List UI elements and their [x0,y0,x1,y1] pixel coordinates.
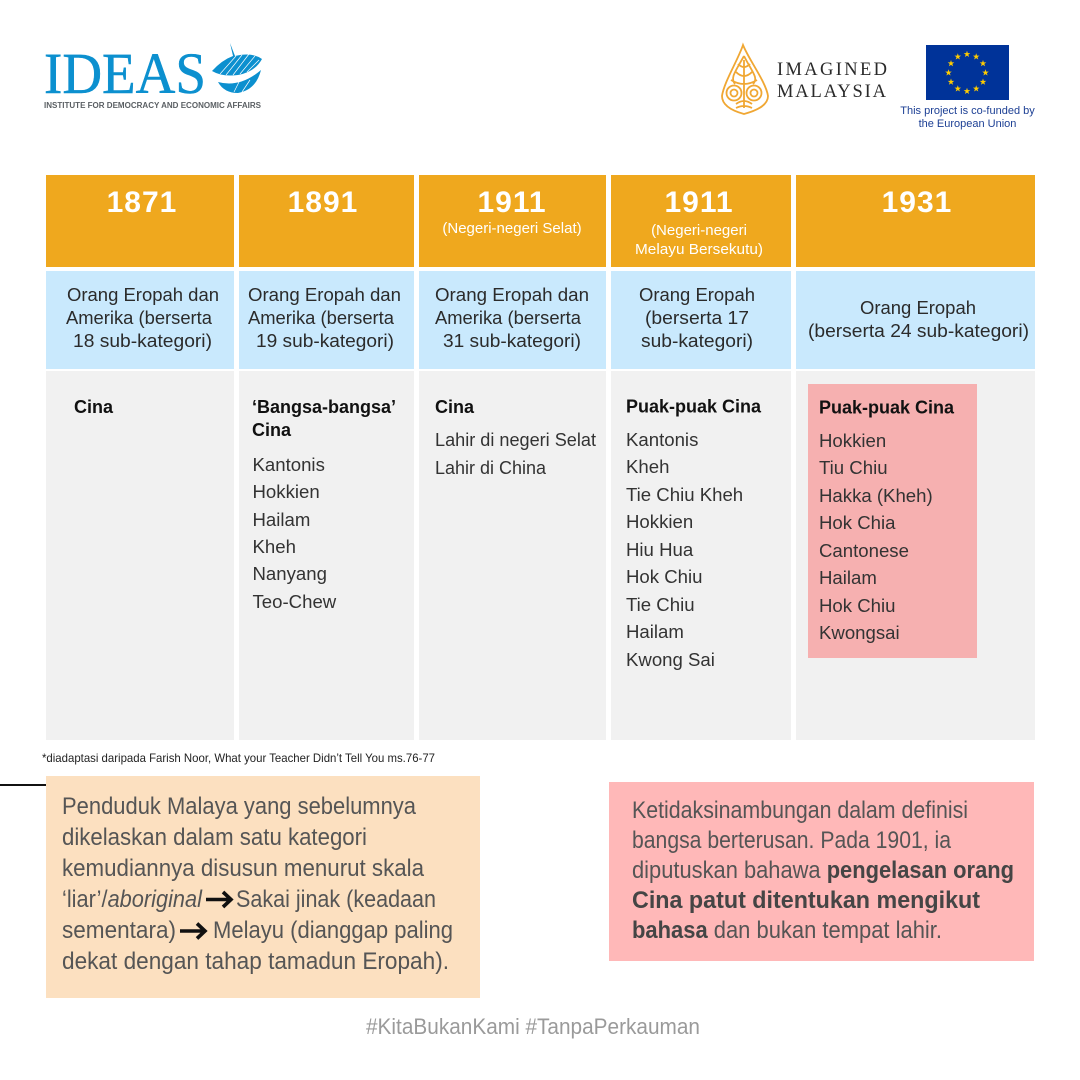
cell 1871: Amerika (berserta [66,307,213,328]
column 1891: Teo-Chew [252,591,337,612]
column 1911 Melayu [611,371,791,740]
highlight box: Puak-puak Cina: Puak-puak Cina [819,398,955,418]
header 1871 [46,175,234,267]
column 1911 Melayu: Puak-puak Cina [626,396,762,416]
callout: classification scale: Melayu (dianggap paling [213,917,453,944]
highlight box: Puak-puak Cina: Tiu Chiu [819,457,888,478]
column 1931 [796,371,1035,740]
column 1911 Melayu: Tie Chiu Kheh [626,484,743,505]
rule leading to callout [0,784,46,786]
wordmark: Imagined: IMAGINED [777,60,887,80]
logo wordmark: IDEAS [44,41,206,106]
column 1891: Hokkien [252,481,320,502]
column 1891: Nanyang [252,563,327,584]
column 1871 [46,371,234,740]
column 1911 Melayu: Kheh [626,456,669,477]
cell 1891: Amerika (berserta [248,307,395,328]
callout: classification scale: ‘liar’/aboriginal [62,886,202,913]
column 1911 Melayu: Hok Chiu [626,566,702,587]
EU funding caption: This project is co-funded by [900,105,1035,117]
cell 1911 Melayu: (berserta 17 [645,307,749,328]
cell 1931 [796,271,1035,369]
header 1891 [239,175,414,267]
header 1911 Melayu Bersekutu [611,175,791,267]
highlight box: Puak-puak Cina: Hailam [819,567,877,588]
cell 1911 Selat [419,271,606,369]
EU funding caption: the European Union [919,118,1016,130]
cell 1911 Selat: 31 sub-kategori) [443,330,581,351]
header 1871: 1871 [107,186,177,219]
cell 1911 Melayu [611,271,791,369]
highlight box: Puak-puak Cina: Hokkien [819,430,886,451]
callout: classification scale: kemudiannya disusun menurut skala [62,855,424,882]
EU flag [926,45,1009,100]
callout: classification scale: dekat dengan tahap tamadun Eropah). [62,948,449,975]
header 1931: 1931 [882,186,952,219]
callout: language definition: Cina patut ditentukan mengikut [632,887,980,914]
callout: classification scale: sementara) [62,917,176,944]
column 1891: Hailam [252,509,310,530]
column 1911 Melayu: Kantonis [626,429,698,450]
wordmark: Malaysia: MALAYSIA [777,82,887,102]
arrow [180,924,205,938]
column 1911 Melayu: Hiu Hua [626,539,694,560]
table row: European categories [46,271,1035,369]
column 1911 Selat: Lahir di negeri Selat [435,429,597,450]
cell 1871: 18 sub-kategori) [73,330,212,351]
EU logo [900,45,1035,130]
column 1911 Selat: Cina [435,397,475,417]
cell 1871 [46,271,234,369]
logo tagline: INSTITUTE FOR DEMOCRACY AND ECONOMIC AFFAIRS [44,101,262,110]
callout: classification scale [46,776,480,998]
column 1891: ‘Bangsa-bangsa’ [252,397,396,417]
source footnote: *diadaptasi daripada Farish Noor, What your Teacher Didn’t Tell You ms.76-77 [42,751,435,765]
highlight box: Puak-puak Cina: Kwongsai [819,622,900,643]
callout: language definition: bangsa berterusan. Pada 1901, ia [632,827,951,854]
header 1931 [796,175,1035,267]
column 1891: Cina [252,420,292,440]
column 1891: Kheh [252,536,296,557]
callout: language definition: bahasa dan bukan tempat lahir. [632,917,942,944]
callout: language definition [609,782,1034,961]
column 1911 Selat [419,371,606,740]
header 1911 Selat: 1911 [477,186,547,219]
cell 1891 [239,271,414,369]
callout: classification scale: Sakai jinak (keadaan [236,886,436,913]
cell 1911 Melayu: sub-kategori) [641,330,753,351]
cell 1911 Selat: Orang Eropah dan [435,284,589,305]
cell 1871: Orang Eropah dan [67,284,219,305]
callout: language definition: Ketidaksinambungan dalam definisi [632,797,968,824]
IDEAS logo [44,41,262,110]
table row: Chinese categories [46,371,1035,740]
arrow [206,892,231,907]
callout: classification scale: dikelaskan dalam satu kategori [62,824,367,851]
cell 1891: 19 sub-kategori) [256,330,394,351]
highlight box: Puak-puak Cina: Hakka (Kheh) [819,485,933,506]
table header: years [46,175,1035,267]
cell 1911 Melayu: Orang Eropah [639,284,755,305]
header 1911 Melayu Bersekutu: Melayu Bersekutu) [635,241,763,258]
header 1911 Selat [419,175,606,267]
column 1911 Selat: Lahir di China [435,457,547,478]
logo bird icon [212,43,262,93]
callout: language definition: diputuskan bahawa pengelasan orang [632,857,1014,884]
cell 1931: Orang Eropah [860,297,976,318]
cell 1891: Orang Eropah dan [248,284,401,305]
cell 1931: (berserta 24 sub-kategori) [808,320,1029,341]
EU stars [945,51,989,94]
header 1911 Melayu Bersekutu: 1911 [664,186,734,219]
column 1911 Melayu: Hokkien [626,511,693,532]
highlight box: Puak-puak Cina: Hok Chiu [819,595,895,616]
header 1911 Melayu Bersekutu: (Negeri-negeri [651,222,747,239]
highlight box: Puak-puak Cina: Hok Chia [819,512,896,533]
callout: classification scale: Penduduk Malaya yang sebelumnya [62,793,416,820]
cell 1911 Selat: Amerika (berserta [435,307,582,328]
hashtags: #KitaBukanKami #TanpaPerkauman [366,1014,700,1039]
highlight box: Puak-puak Cina: Cantonese [819,540,909,561]
Imagined Malaysia logo [722,45,887,114]
column 1911 Melayu: Hailam [626,621,684,642]
column 1911 Melayu: Kwong Sai [626,649,715,670]
icon: wayang puppet [722,45,768,114]
column 1911 Melayu: Tie Chiu [626,594,695,615]
column 1891: Kantonis [252,454,325,475]
column 1891 [239,371,414,740]
header 1891: 1891 [288,186,358,219]
column 1871: Cina [74,397,114,417]
header 1911 Selat: (Negeri-negeri Selat) [442,220,582,237]
highlight box: Puak-puak Cina [808,384,977,658]
